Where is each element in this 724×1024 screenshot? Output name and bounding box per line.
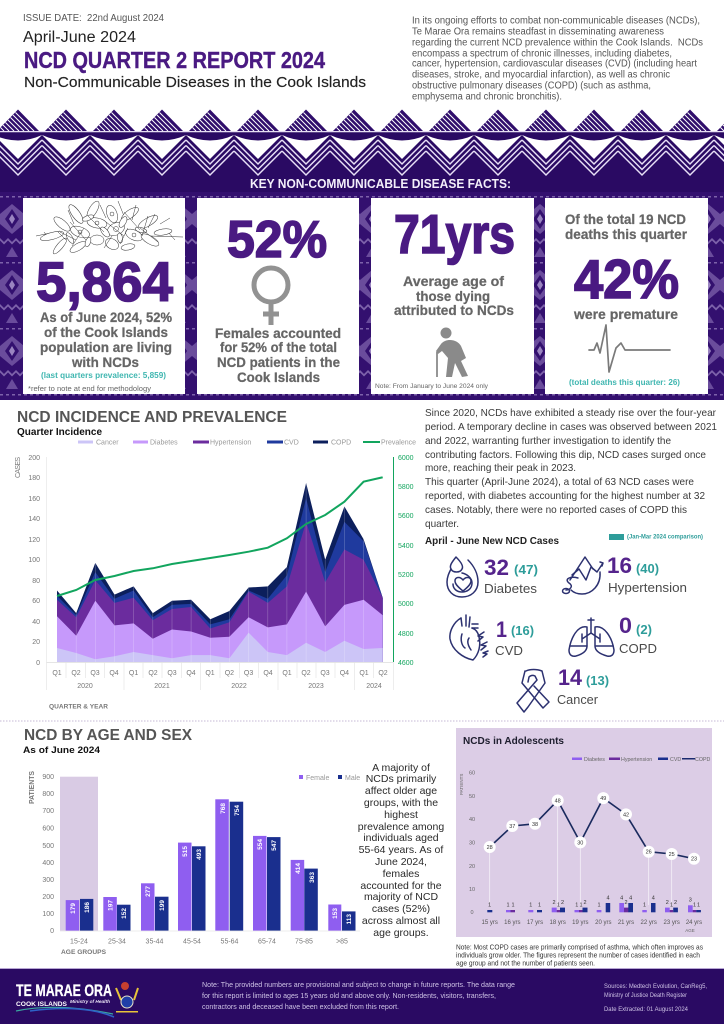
- quarter axis: [46, 662, 394, 690]
- x axis labels: >85: [336, 938, 348, 946]
- y axis: 30: [469, 840, 475, 846]
- trend text block: quarter.: [425, 518, 459, 530]
- y axis: 800: [42, 791, 54, 798]
- stat: COPD: COPD: [619, 641, 657, 656]
- subheading: quarter incidence: Quarter Incidence: [17, 427, 102, 438]
- panel: NCDs in adolescents: [456, 728, 712, 937]
- quarter axis: Q1: [52, 670, 62, 677]
- age commentary text block: groups, with the: [364, 797, 438, 809]
- left axis: 20: [32, 639, 40, 646]
- intro text block: diseases, stroke, and myocardial infarction), as well as chronic: [412, 70, 670, 80]
- small bar values: 2: [666, 900, 669, 906]
- sources: Sources: Medtech Evolution, CanReg5,: [604, 984, 707, 990]
- line markers and values: 42: [623, 812, 629, 818]
- stat: COPD: (2): [636, 622, 652, 637]
- description: [215, 325, 341, 385]
- x axis labels: 19 yrs: [572, 920, 588, 926]
- header: period: April-June 2024: [23, 29, 136, 46]
- y axis: 600: [42, 826, 54, 832]
- axis title: patients: PATIENTS: [29, 771, 36, 804]
- subheading: as of June 2024: As of June 2024: [23, 745, 101, 756]
- icon: flower line art: [36, 199, 183, 256]
- small bar values: 1: [670, 902, 673, 908]
- intro text block: cancer, hypertension, cardiovascular diseases (CVD) (including heart: [412, 58, 697, 70]
- header: issue date: ISSUE DATE: 22nd August 2024: [23, 13, 164, 24]
- trend text block: [425, 407, 717, 530]
- left axis: 60: [32, 598, 40, 605]
- quarter axis: 2022: [231, 683, 247, 690]
- left axis: 140: [28, 516, 40, 523]
- bar value labels: 186: [84, 902, 91, 913]
- premature label: were premature: [573, 306, 678, 322]
- quarter axis: 2024: [366, 683, 382, 690]
- chart legend: COPD: [331, 440, 351, 446]
- sources: [604, 984, 707, 1013]
- x axis labels: 55-64: [221, 938, 239, 946]
- intro text block: Te Marae Ora remains steadfast in disseminating awareness: [412, 26, 664, 38]
- description: As of June 2024, 52%: [40, 309, 173, 325]
- stat: 52%: 52%: [227, 211, 327, 269]
- quarter axis: Q2: [378, 670, 388, 677]
- small bar values: 2: [561, 900, 564, 906]
- chart legend: Hypertension: [210, 440, 251, 446]
- description: those dying: [416, 288, 490, 304]
- stat: COPD: 0: [619, 613, 632, 638]
- y axis: 300: [42, 877, 54, 884]
- stat: diabetes: (47): [514, 562, 538, 577]
- quarter axis: Q2: [71, 670, 81, 677]
- sources: Date Extracted: 01 August 2024: [604, 1007, 689, 1013]
- line markers and values: 28: [487, 845, 493, 851]
- chart legend: [78, 440, 416, 446]
- small bar values: 1: [697, 902, 700, 908]
- stat: CVD: (16): [511, 623, 534, 638]
- small bar values: 1: [488, 902, 491, 908]
- deaths label: deaths this quarter: [565, 226, 688, 242]
- quarter axis: Q3: [167, 670, 177, 677]
- intro text block: [412, 16, 703, 102]
- x axis labels: 75-85: [295, 938, 313, 946]
- description: Cook Islands: [237, 369, 320, 385]
- COPD area: [57, 483, 383, 662]
- age commentary text block: accounted for the: [360, 880, 442, 892]
- small bars: [487, 903, 701, 912]
- intro text block: encompass a spectrum of chronic illnesses, including diabetes,: [412, 48, 672, 60]
- x axis labels: [482, 920, 702, 926]
- right axis: 4600: [398, 660, 414, 667]
- description: attributed to NCDs: [394, 302, 514, 318]
- right axis: 5800: [398, 484, 414, 491]
- quarter axis: Q4: [263, 670, 273, 677]
- age commentary text block: across almost all: [362, 915, 440, 927]
- axis title: cases: CASES: [15, 457, 22, 478]
- stat: 5,864: 5,864: [36, 250, 173, 313]
- panel: NCDs in adolescents: AGE: [685, 928, 695, 933]
- bar value labels: 199: [159, 900, 166, 911]
- right axis: 5000: [398, 601, 414, 608]
- x axis labels: 17 yrs: [527, 920, 543, 926]
- legend: [572, 757, 710, 763]
- icon: heart with signals: [450, 615, 488, 660]
- bar value labels: 179: [70, 903, 77, 914]
- bar value labels: 515: [182, 846, 189, 857]
- y axis: 40: [469, 817, 475, 823]
- quarter axis: Q3: [244, 670, 253, 677]
- age commentary text block: NCDs primarily: [366, 773, 437, 785]
- description: with NCDs: [71, 354, 139, 370]
- hypertension area: [57, 522, 383, 662]
- chart legend: Cancer: [96, 440, 119, 446]
- left axis: 80: [32, 578, 40, 585]
- COPD line: [490, 798, 694, 859]
- logo: COOK ISLANDS: [16, 1001, 68, 1008]
- chart legend: CVD: [284, 440, 299, 446]
- trend text block: more, reaching their peak in 2023.: [425, 462, 576, 474]
- line markers and values: [484, 792, 700, 865]
- patterned facts panel background: [0, 192, 724, 400]
- quarter axis: Q1: [205, 670, 215, 677]
- x axis labels: 24 yrs: [686, 920, 702, 926]
- stat: cancer: Cancer: [557, 692, 599, 707]
- quarter axis: Q2: [301, 670, 311, 677]
- area chart: quarter incidence and prevalence: [15, 440, 416, 710]
- left axis: 200: [28, 455, 40, 462]
- left axis: 120: [28, 537, 40, 544]
- x axis labels: 16 yrs: [504, 920, 520, 926]
- y axis: 0: [470, 910, 474, 916]
- small bar values: [488, 896, 700, 908]
- trend text block: reported, with diabetes accounting for the highest number at 32: [425, 490, 705, 502]
- y axis: [469, 770, 475, 916]
- small bar values: 1: [511, 902, 515, 908]
- heading: age and sex: NCD BY AGE AND SEX: [24, 727, 193, 744]
- bar value labels: 768: [220, 803, 227, 814]
- line markers and values: 38: [532, 822, 538, 828]
- line markers and values: 30: [577, 840, 583, 846]
- left axis: 100: [28, 557, 40, 564]
- x axis labels: 21 yrs: [618, 920, 634, 926]
- female bars: [66, 799, 341, 931]
- x axis labels: 35-44: [146, 938, 164, 946]
- stat: hypertension: Hypertension: [608, 580, 687, 595]
- logo: Ministry of Health: [70, 999, 110, 1004]
- legend: Male: [345, 775, 360, 782]
- cancer area: [57, 633, 383, 662]
- legend: Hypertension: [621, 757, 652, 763]
- age commentary text block: females: [383, 868, 419, 880]
- footer: [0, 968, 724, 1024]
- x axis labels: 65-74: [258, 938, 276, 946]
- small bar values: 4: [652, 896, 655, 902]
- bar chart: patients by age and sex: [29, 771, 360, 956]
- bar value labels: [70, 803, 353, 924]
- stat: diabetes: Diabetes: [484, 581, 538, 596]
- left axis: [28, 455, 40, 667]
- heading: incidence and prevalence: NCD INCIDENCE AND PREVALENCE: [17, 409, 287, 426]
- bar value labels: 754: [234, 805, 241, 816]
- card: females: [197, 198, 359, 394]
- icon: heartbeat line: [589, 325, 670, 372]
- line markers and values: 23: [691, 857, 697, 863]
- stat: diabetes: 32: [484, 555, 509, 580]
- y axis: 200: [42, 894, 54, 901]
- trend text block: Since 2020, NCDs have exhibited a steady rise over the four-year: [425, 407, 716, 419]
- age commentary text block: affect older age: [365, 785, 437, 797]
- trend text block: cases. Notably, there were no reported cases of COPD this: [425, 504, 687, 516]
- methodology note: *refer to note at end for methodology: [28, 386, 152, 393]
- small bar values: 3: [689, 898, 692, 904]
- stat: cancer: 14: [558, 665, 583, 690]
- x axis labels: 25-34: [108, 938, 126, 946]
- stat: cancer: [517, 665, 609, 712]
- right axis: 5400: [398, 543, 414, 550]
- total deaths note: (total deaths this quarter: 26): [569, 378, 680, 387]
- y axis: 400: [42, 860, 54, 867]
- COPD note: individuals grow older. The figures represent the number of cases identified in each: [456, 950, 700, 960]
- description: population are living: [40, 339, 172, 355]
- stat: 71yrs: 71yrs: [394, 203, 515, 265]
- small bar values: 1: [693, 902, 696, 908]
- previous prevalence note: (last quarters prevalence: 5,859): [41, 371, 166, 380]
- legend: CVD: [670, 757, 681, 763]
- stat: hypertension: (40): [636, 561, 659, 576]
- deaths label: Of the total 19 NCD: [565, 211, 686, 227]
- small bar values: 1: [643, 902, 646, 908]
- card: premature deaths: [545, 198, 708, 394]
- small bar values: 1: [557, 902, 560, 908]
- card: prevalence: [23, 198, 185, 394]
- subheading: new NCD cases: April - June New NCD Cases: [425, 536, 559, 547]
- legend: Female: [306, 775, 329, 782]
- y axis: 500: [42, 843, 54, 850]
- chart legend: Diabetes: [150, 440, 178, 446]
- line markers and values: 25: [669, 852, 675, 858]
- bar value labels: 493: [196, 849, 203, 860]
- quarter axis: 2020: [77, 683, 93, 690]
- drop lines: [490, 800, 672, 905]
- right axis: 4800: [398, 631, 414, 638]
- description: of the Cook Islands: [44, 324, 168, 340]
- small bar values: 1: [538, 902, 541, 908]
- axis title: quarter and year: QUARTER & YEAR: [49, 704, 108, 710]
- COPD note: Note: Most COPD cases are primarily comprised of asthma, which often improves as: [456, 942, 703, 952]
- facts heading: KEY NON-COMMUNICABLE DISEASE FACTS:: [250, 177, 511, 191]
- stat: CVD: [450, 615, 534, 660]
- y axis: 50: [469, 794, 475, 800]
- trend text block: contributing factors. Following this dip, NCD cases surged once: [425, 449, 706, 461]
- footer note: [202, 980, 515, 1011]
- tribal pattern band: [0, 108, 724, 198]
- quarter axis: Q4: [109, 670, 119, 677]
- small bar values: 1: [597, 902, 601, 908]
- right axis: [394, 455, 414, 667]
- description: [394, 273, 514, 318]
- bar value labels: 197: [108, 900, 114, 911]
- small bar values: 1: [529, 902, 532, 908]
- quarter axis: Q1: [129, 670, 138, 677]
- bar value labels: 152: [121, 908, 128, 919]
- stat: cancer: (13): [586, 673, 609, 688]
- age commentary text block: highest: [384, 809, 418, 821]
- quarter axis: 2023: [308, 683, 324, 690]
- bar value labels: 414: [295, 863, 302, 874]
- legend: [299, 775, 360, 782]
- quarter axis: 2021: [154, 683, 170, 690]
- bar value labels: 547: [271, 840, 278, 851]
- age commentary text block: A majority of: [372, 762, 430, 774]
- quarter axis: Q2: [148, 670, 158, 677]
- axis title: age groups: AGE GROUPS: [61, 949, 107, 956]
- axis title: PATIENTS: [459, 774, 464, 795]
- stat: hypertension: [562, 553, 687, 595]
- x axis labels: 23 yrs: [664, 920, 680, 926]
- right axis: 5200: [398, 572, 414, 579]
- description: [40, 309, 173, 370]
- subtitle: Non-Communicable Diseases in the Cook Islands: [24, 75, 366, 91]
- x axis labels: [70, 938, 348, 946]
- left axis: 180: [28, 475, 40, 482]
- bar value labels: 363: [309, 872, 316, 883]
- y axis: 700: [42, 808, 54, 815]
- small bar values: 4: [629, 896, 632, 902]
- description: NCD patients in the: [217, 354, 340, 370]
- age commentary text block: [358, 762, 444, 939]
- highlight column: [60, 777, 98, 931]
- intro text block: In its ongoing efforts to combat non-communicable diseases (NCDs),: [412, 16, 700, 26]
- icon: hypertension gauge: [562, 557, 603, 594]
- coat of arms: [116, 982, 138, 1012]
- card: average age: [371, 198, 534, 394]
- x axis labels: 15 yrs: [482, 920, 498, 926]
- title: NCD QUARTER 2 REPORT 2024: [24, 47, 325, 73]
- prevalence line: [57, 477, 383, 596]
- small bar values: 4: [620, 896, 623, 902]
- y axis: 900: [42, 774, 54, 781]
- small bar values: 1: [506, 902, 510, 908]
- age commentary text block: individuals aged: [363, 832, 439, 844]
- period note: Note: From January to June 2024 only: [375, 383, 489, 390]
- legend: COPD: [695, 757, 710, 763]
- quarter axis: Q1: [359, 670, 369, 677]
- small bar values: 1: [579, 902, 583, 908]
- COPD note: [456, 942, 703, 968]
- bar value labels: 277: [145, 886, 152, 897]
- x axis labels: 18 yrs: [550, 920, 566, 926]
- stat: diabetes: [447, 555, 538, 597]
- intro text block: emphysema and chronic bronchitis).: [412, 92, 562, 102]
- y axis: 100: [42, 911, 54, 918]
- x axis labels: 20 yrs: [595, 920, 611, 926]
- line markers and values: 48: [555, 798, 561, 804]
- y axis: 60: [469, 770, 475, 776]
- stat: 42%: 42%: [574, 248, 679, 310]
- age commentary text block: age groups.: [373, 927, 429, 939]
- bar value labels: 554: [257, 839, 264, 850]
- icon: ribbon: [517, 670, 549, 712]
- line markers and values: 49: [600, 796, 606, 802]
- stat: hypertension: 16: [607, 553, 632, 578]
- quarter axis: Q4: [186, 670, 196, 677]
- line markers and values: 26: [646, 850, 652, 856]
- bar value labels: 153: [332, 908, 339, 919]
- description: Average age of: [403, 273, 504, 289]
- male bars: [80, 802, 356, 931]
- CVD area: [57, 498, 383, 662]
- icon: diabetes drop and heart: [447, 557, 478, 597]
- quarter axis: Q2: [225, 670, 234, 677]
- footer note: Note: The provided numbers are provisional and subject to change in future reports. The data range: [202, 980, 515, 989]
- stat: CVD: CVD: [495, 643, 523, 658]
- age commentary text block: 55-64 years. As of: [359, 844, 443, 856]
- chart legend: Prevalence: [381, 440, 416, 446]
- diabetes area: [57, 592, 383, 662]
- left axis: 40: [32, 619, 40, 626]
- small bar values: 2: [583, 900, 587, 906]
- icon: elderly person: [436, 328, 468, 377]
- sources: Ministry of Justice Death Register: [604, 993, 687, 999]
- bar value labels: 113: [346, 914, 353, 924]
- comparison legend: (Jan-Mar 2024 comparison): [627, 534, 703, 540]
- panel title: NCDs in Adolescents: [463, 735, 564, 747]
- left axis: 160: [28, 496, 40, 503]
- quarter axis: Q3: [90, 670, 100, 677]
- deaths label: [565, 211, 688, 242]
- age commentary text block: cases (52%): [372, 903, 430, 915]
- intro text block: obstructive pulmonary diseases (COPD) (such as asthma,: [412, 80, 651, 92]
- logo: [16, 981, 138, 1017]
- age commentary text block: June 2024,: [375, 856, 427, 868]
- x axis labels: 15-24: [70, 938, 88, 946]
- small bar values: 2: [624, 900, 628, 906]
- stat: COPD: [569, 613, 657, 656]
- intro text block: regarding the current NCD prevalence within the Cook Islands. NCDs: [412, 38, 703, 48]
- small bar values: 2: [552, 900, 556, 906]
- stat: CVD: 1: [496, 617, 507, 642]
- small bar values: 4: [606, 896, 610, 902]
- description: Females accounted: [215, 325, 341, 341]
- description: for 52% of the total: [220, 339, 337, 355]
- age commentary text block: majority of NCD: [364, 891, 438, 903]
- age commentary text block: prevalence among: [358, 821, 444, 833]
- quarter axis: Q3: [320, 670, 330, 677]
- COPD note: age group and not the number of patients seen.: [456, 958, 595, 968]
- x axis labels: 45-54: [183, 938, 201, 946]
- quarter axis: Q4: [340, 670, 349, 677]
- small bar values: 2: [674, 900, 677, 906]
- icon: female symbol: [254, 268, 288, 325]
- footer note: contractors and deceased have been excluded from this report.: [202, 1002, 399, 1011]
- legend: Diabetes: [584, 757, 605, 763]
- left axis: 0: [36, 660, 40, 667]
- line markers and values: 37: [509, 824, 515, 830]
- logo: TE MARAE ORA: [16, 981, 112, 1000]
- quarter axis: Q1: [282, 670, 292, 677]
- trend text block: This quarter (April-June 2024), a total of 63 NCD cases were: [425, 476, 694, 488]
- x axis labels: 22 yrs: [641, 920, 657, 926]
- footer note: for this report is limited to ages 15 years old and above only. Non-residents, visitors, transfers,: [202, 991, 496, 1000]
- trend text block: period. A temporary decline in cases was observed between 2021: [425, 421, 717, 433]
- y axis: 20: [469, 864, 475, 870]
- right axis: 5600: [398, 513, 414, 520]
- y axis: [42, 774, 54, 935]
- icon: lungs: [569, 618, 614, 656]
- right axis: 6000: [398, 455, 414, 462]
- small bar values: 1: [575, 902, 578, 908]
- trend text block: and 2022, warranting further investigation to identify the: [425, 435, 671, 447]
- y axis: 10: [469, 887, 475, 893]
- y axis: 0: [50, 928, 54, 935]
